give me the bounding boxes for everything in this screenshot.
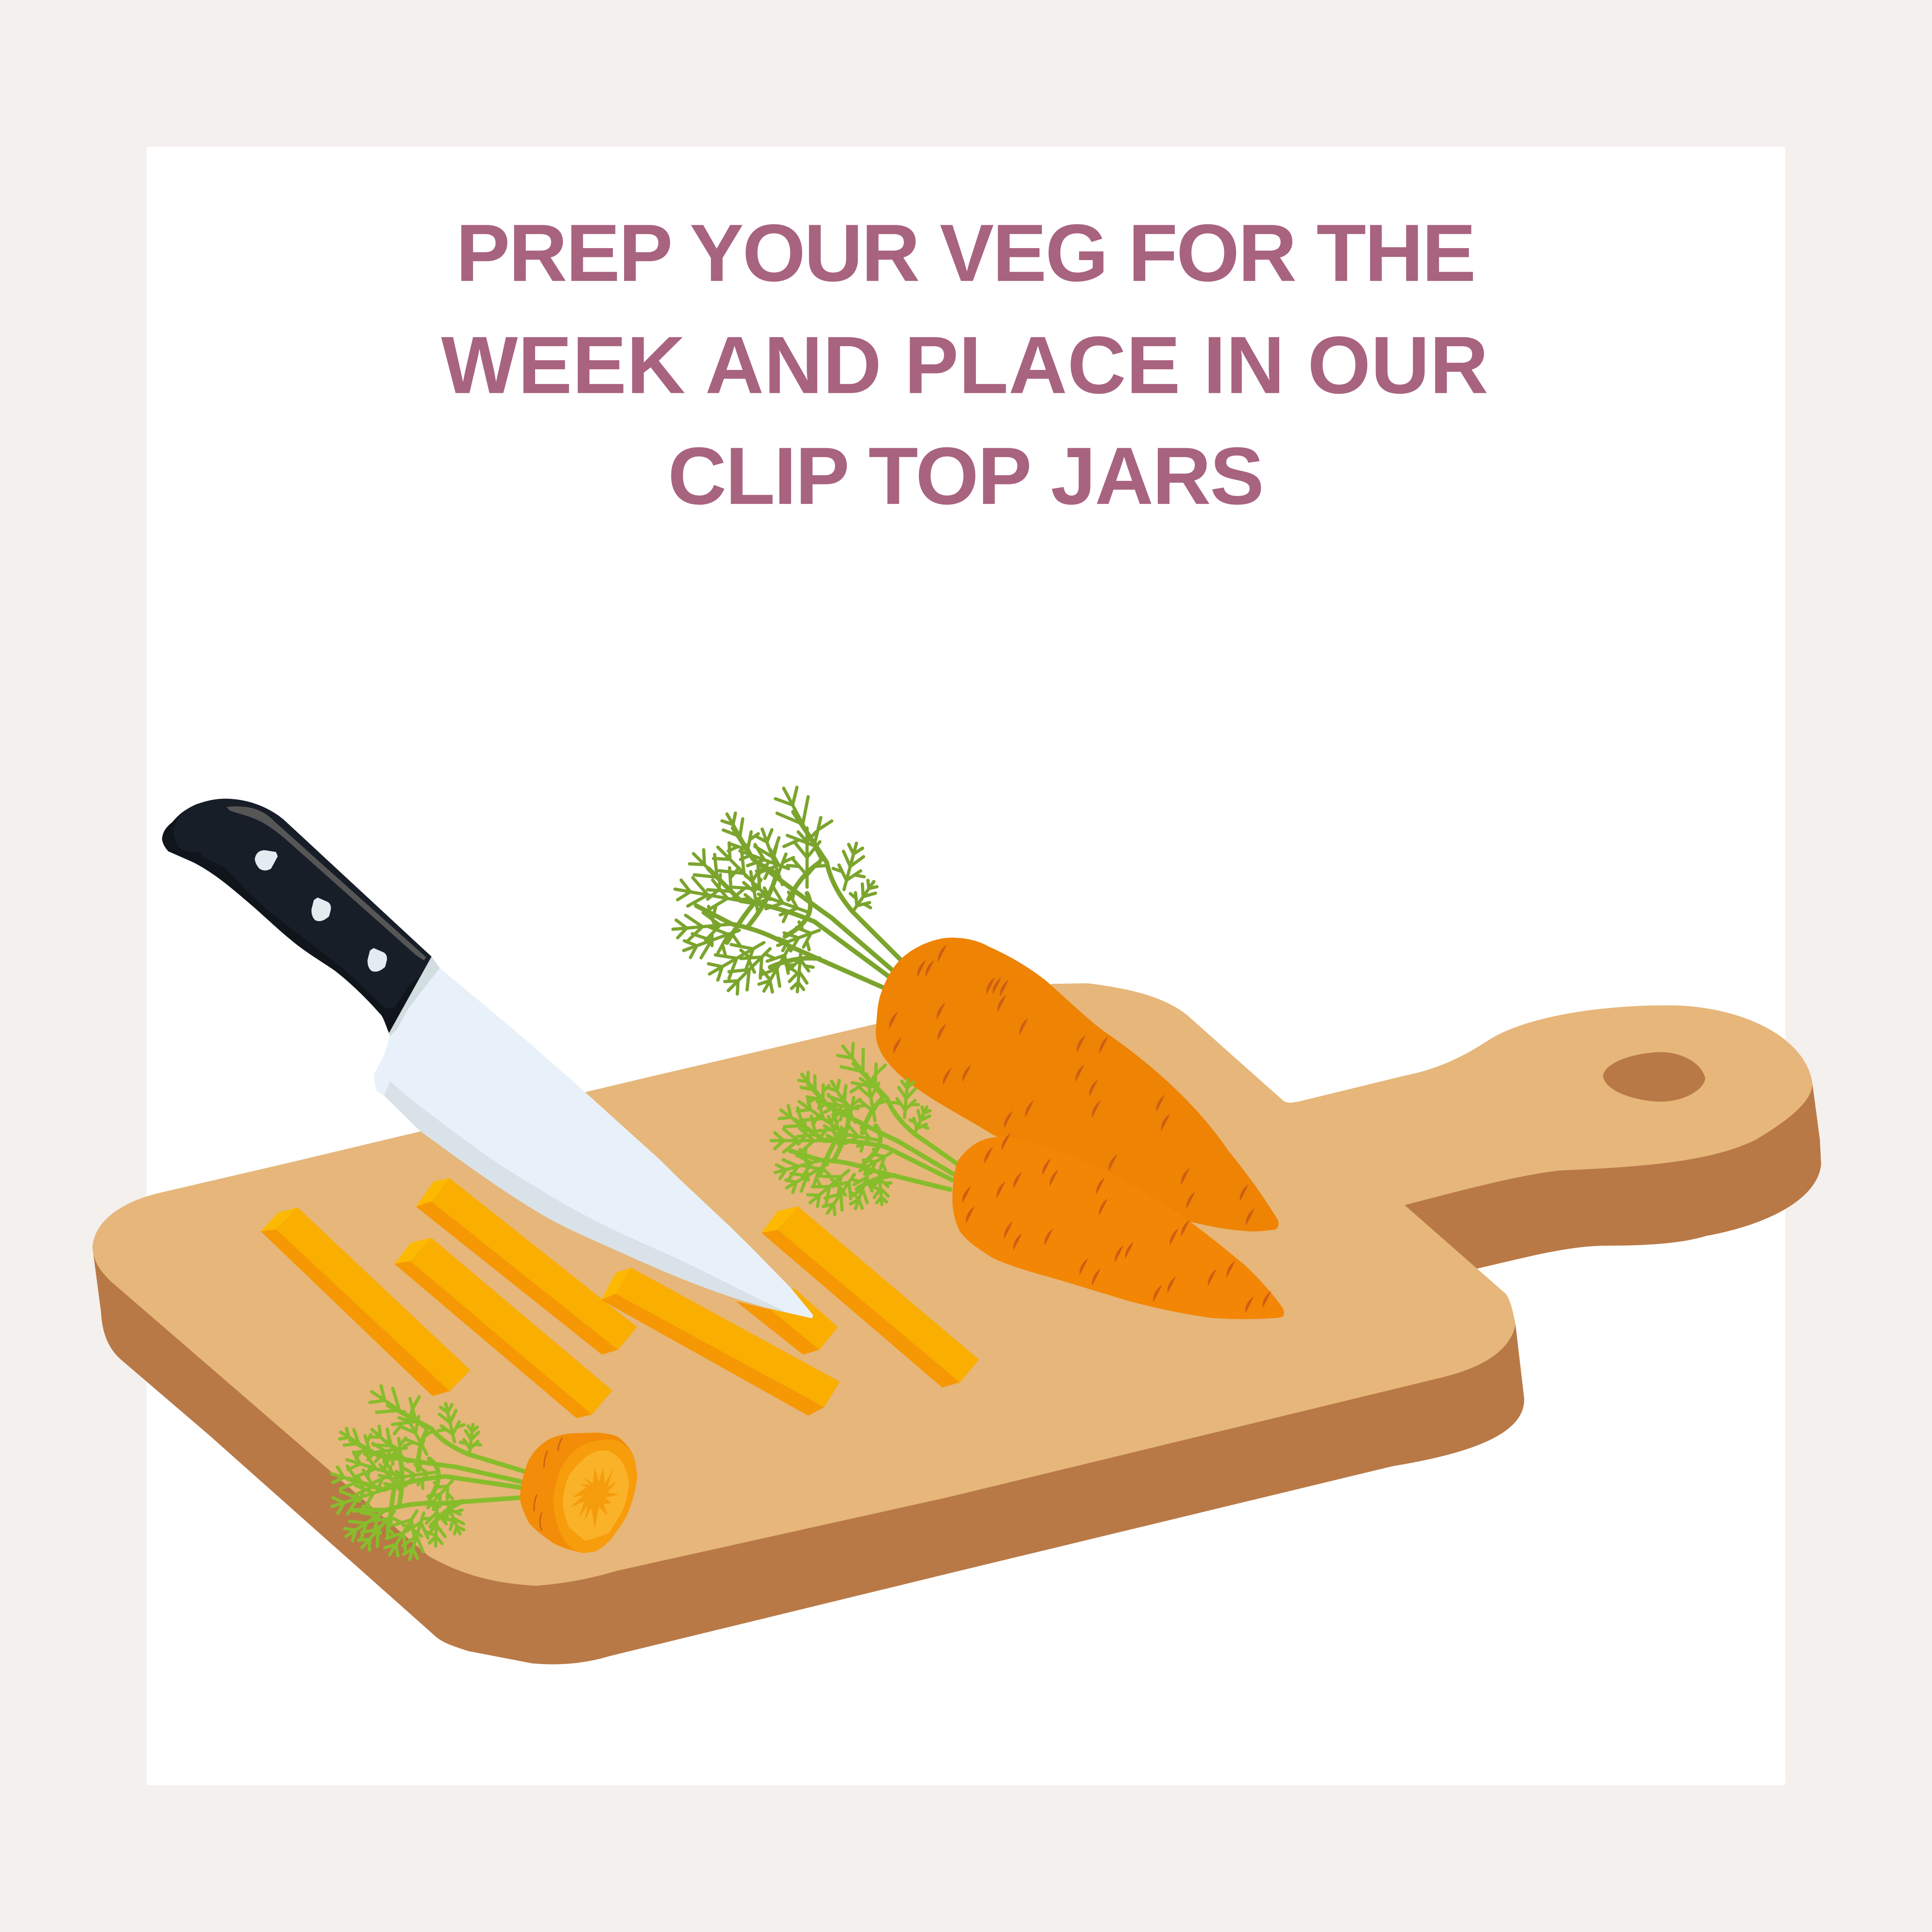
carrot 1	[876, 937, 1279, 1231]
handle highlight	[226, 806, 427, 961]
board top surface	[92, 983, 1812, 1586]
rivet 3	[368, 948, 387, 972]
carrot 2	[952, 1133, 1284, 1319]
rivet 2	[312, 898, 331, 921]
slice core star	[570, 1467, 619, 1528]
rivet 1	[255, 850, 278, 871]
slice skin marks	[534, 1439, 562, 1530]
stick 1	[261, 1207, 470, 1396]
knife	[162, 799, 813, 1319]
cutting board	[92, 983, 1821, 1664]
handle hole	[1603, 1052, 1705, 1102]
carrot 1 greens	[671, 776, 902, 1005]
title	[441, 208, 1488, 522]
sliced carrot greens	[286, 1337, 541, 1592]
knife handle	[162, 799, 432, 1033]
white panel	[147, 147, 1785, 1785]
sliced carrot end	[520, 1433, 637, 1553]
stick 4	[736, 1289, 838, 1355]
stick 2	[394, 1237, 612, 1418]
stick 6	[761, 1206, 979, 1387]
stick 3	[416, 1178, 637, 1355]
carrot 2 greens	[752, 1020, 966, 1232]
knife blade	[374, 956, 813, 1319]
stick 5	[601, 1268, 840, 1416]
title: WEEK AND PLACE IN OUR	[441, 320, 1488, 411]
carrot sticks	[261, 1178, 979, 1418]
board side thickness	[92, 1084, 1821, 1664]
title: PREP YOUR VEG FOR THE	[456, 208, 1476, 299]
title: CLIP TOP JARS	[668, 431, 1264, 522]
